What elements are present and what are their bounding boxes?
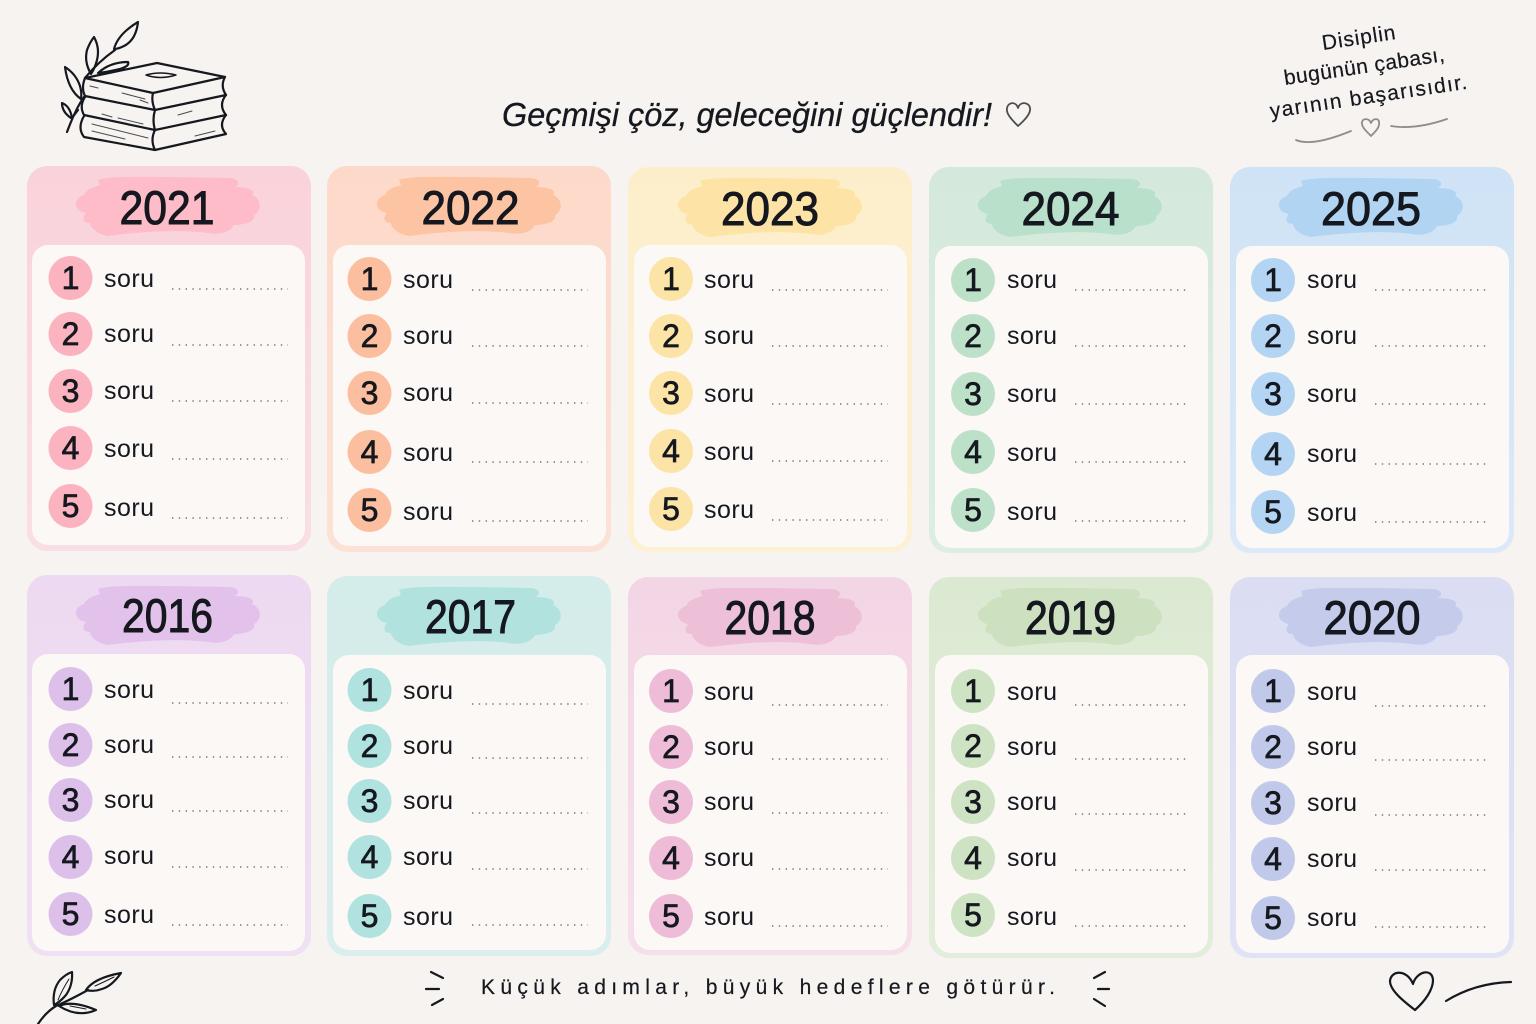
year blob <box>377 587 561 646</box>
question 5 <box>1251 896 1490 940</box>
question 3: 3 <box>1264 785 1282 821</box>
question 2: 2 <box>964 318 982 354</box>
question 1: soru <box>1007 266 1057 294</box>
card background <box>929 167 1213 553</box>
card: 2020 <box>1230 577 1514 958</box>
question 4: 4 <box>964 434 982 470</box>
question 3 <box>649 371 888 415</box>
card background <box>929 577 1213 958</box>
question 3: soru <box>403 787 453 815</box>
year: 2024 <box>1022 182 1120 235</box>
question 5: 5 <box>62 488 79 524</box>
question 3: soru <box>704 788 754 816</box>
question 1 <box>649 257 888 301</box>
year blob <box>678 178 862 237</box>
question 2 <box>951 724 1190 768</box>
question 5 <box>348 488 588 532</box>
question 5: soru <box>1007 903 1057 931</box>
question 5: 5 <box>361 898 378 934</box>
question 3 <box>1251 372 1490 416</box>
year blob <box>978 588 1162 647</box>
year blob <box>1279 178 1463 237</box>
question 2: 2 <box>62 316 79 352</box>
question 2 <box>348 724 588 768</box>
question 1: 1 <box>1264 673 1282 709</box>
question 3: soru <box>104 786 154 814</box>
question 3: 3 <box>62 373 79 409</box>
question 1: 1 <box>662 673 680 709</box>
question 5: soru <box>403 498 453 526</box>
question 1: soru <box>704 266 754 294</box>
question 4: 4 <box>662 433 680 469</box>
question 1: 1 <box>964 673 982 709</box>
year: 2017 <box>425 590 516 643</box>
question 3 <box>1251 781 1490 825</box>
question 2: 2 <box>662 729 680 765</box>
question 5 <box>1251 490 1490 534</box>
question 5: 5 <box>662 898 680 934</box>
question 4 <box>348 835 588 879</box>
question 4: 4 <box>1264 436 1282 472</box>
year blob <box>377 177 561 236</box>
card background <box>27 166 311 551</box>
question 5 <box>649 894 888 938</box>
question panel <box>634 245 907 547</box>
question 4 <box>48 835 288 879</box>
question 4: 4 <box>662 840 680 876</box>
card background <box>628 167 912 552</box>
question 4: soru <box>1307 845 1357 873</box>
footer left dashes <box>426 972 443 1005</box>
question 1: soru <box>104 676 154 704</box>
question 5 <box>348 894 588 938</box>
card: 2023 <box>628 167 912 552</box>
question 1: soru <box>1307 678 1357 706</box>
question 5: 5 <box>1264 900 1282 936</box>
footer right dashes <box>1094 972 1109 1006</box>
question 2 <box>649 314 888 358</box>
question 5: soru <box>704 496 754 524</box>
question 4: 4 <box>62 839 79 875</box>
question 2: 2 <box>662 318 680 354</box>
year: 2022 <box>422 181 520 234</box>
question 2: soru <box>104 731 154 759</box>
question 2 <box>348 314 588 358</box>
card: 2022 <box>327 166 611 552</box>
question 5: soru <box>1007 498 1057 526</box>
question 5: soru <box>104 494 154 522</box>
card background <box>1230 167 1514 553</box>
question 1 <box>1251 258 1490 302</box>
year: 2016 <box>122 589 213 642</box>
card: 2017 <box>327 576 611 956</box>
question 2 <box>951 314 1190 358</box>
question 3: 3 <box>361 375 378 411</box>
question 2: soru <box>1307 322 1357 350</box>
question 5: soru <box>403 903 453 931</box>
question 1 <box>48 667 288 711</box>
question 2 <box>1251 725 1490 769</box>
card: 2018 <box>628 577 912 955</box>
question 3: 3 <box>964 376 982 412</box>
card: 2019 <box>929 577 1213 958</box>
question 2: soru <box>403 322 453 350</box>
question panel <box>32 654 305 951</box>
question 4: 4 <box>361 839 378 875</box>
card background <box>327 166 611 552</box>
card background <box>628 577 912 955</box>
question 3: 3 <box>361 783 378 819</box>
question 3: soru <box>1307 789 1357 817</box>
question 2 <box>649 725 888 769</box>
question 2: soru <box>104 320 154 348</box>
question 1 <box>348 257 588 301</box>
question 3 <box>348 371 588 415</box>
year: 2025 <box>1321 182 1421 235</box>
question 5: soru <box>1307 904 1357 932</box>
card: 2025 <box>1230 167 1514 553</box>
icon: leaf sprig bottom-left <box>38 972 121 1024</box>
question 4 <box>1251 837 1490 881</box>
question 4: 4 <box>964 840 982 876</box>
question 3: 3 <box>662 375 680 411</box>
question 2: soru <box>403 732 453 760</box>
year blob <box>978 178 1162 237</box>
year: 2018 <box>724 591 816 644</box>
question 1: soru <box>1007 678 1057 706</box>
question panel <box>935 655 1208 953</box>
question 4 <box>48 426 288 470</box>
question 4: soru <box>403 843 453 871</box>
question 2 <box>48 312 288 356</box>
question 4: 4 <box>1264 841 1282 877</box>
question 1: 1 <box>361 672 378 708</box>
question 3: 3 <box>964 784 982 820</box>
icon: stack of books with leaves <box>62 22 226 150</box>
year: 2020 <box>1324 591 1420 644</box>
question 4: soru <box>704 438 754 466</box>
top-right quote: yarının başarısıdır. <box>1268 71 1469 123</box>
question 5: 5 <box>1264 494 1282 530</box>
question 1 <box>348 668 588 712</box>
question 1: 1 <box>62 260 79 296</box>
card: 2021 <box>27 166 311 551</box>
year blob <box>1279 588 1463 647</box>
question 3 <box>951 780 1190 824</box>
question 3: soru <box>1007 788 1057 816</box>
year: 2023 <box>721 182 819 235</box>
question 2: soru <box>1007 733 1057 761</box>
question 4 <box>1251 432 1490 476</box>
question 3: soru <box>1307 380 1357 408</box>
question 3: soru <box>403 379 453 407</box>
question 4 <box>348 430 588 474</box>
question 1: 1 <box>662 261 680 297</box>
question 3 <box>48 369 288 413</box>
question 1 <box>951 669 1190 713</box>
question panel <box>935 246 1208 548</box>
card: 2024 <box>929 167 1213 553</box>
question 2 <box>48 723 288 767</box>
question 1 <box>1251 669 1490 713</box>
question 2: 2 <box>361 728 378 764</box>
card background <box>327 576 611 956</box>
question 1: 1 <box>62 671 79 707</box>
question 1: soru <box>104 265 154 293</box>
question 1: 1 <box>361 261 378 297</box>
question 3: soru <box>1007 380 1057 408</box>
year: 2021 <box>120 181 214 234</box>
question 5: soru <box>704 903 754 931</box>
question 4: 4 <box>361 434 378 470</box>
question 4: soru <box>1007 439 1057 467</box>
question 5: soru <box>104 901 154 929</box>
question 1: 1 <box>1264 262 1282 298</box>
top-right quote: Disiplin <box>1320 21 1397 55</box>
question 3 <box>649 780 888 824</box>
top-right quote: bugünün çabası, <box>1282 43 1446 90</box>
question 5 <box>951 488 1190 532</box>
question panel <box>333 655 606 950</box>
question 4 <box>649 836 888 880</box>
question 1: soru <box>704 678 754 706</box>
question 2: soru <box>1307 733 1357 761</box>
question 2: 2 <box>964 728 982 764</box>
question 3: 3 <box>1264 376 1282 412</box>
question 4: soru <box>704 844 754 872</box>
question 1 <box>951 258 1190 302</box>
question 5: soru <box>1307 499 1357 527</box>
question 2: 2 <box>1264 729 1282 765</box>
question 4 <box>951 430 1190 474</box>
question 1: 1 <box>964 262 982 298</box>
card background <box>27 575 311 956</box>
question 4: soru <box>104 435 154 463</box>
question 4: soru <box>403 439 453 467</box>
card background <box>1230 577 1514 958</box>
question 5: 5 <box>361 492 378 528</box>
question panel <box>1236 655 1509 953</box>
question panel <box>333 245 606 546</box>
question 2: soru <box>1007 322 1057 350</box>
icon: title heart <box>1007 103 1030 126</box>
icon: heart with swoosh bottom-right <box>1390 972 1511 1010</box>
question 1 <box>48 256 288 300</box>
question 1: soru <box>403 677 453 705</box>
year blob <box>76 586 260 645</box>
question 4 <box>951 836 1190 880</box>
question 1: soru <box>1307 266 1357 294</box>
card: 2016 <box>27 575 311 956</box>
question 3: soru <box>704 380 754 408</box>
question 2 <box>1251 314 1490 358</box>
footer text: Küçük adımlar, büyük hedeflere götürür. <box>481 976 1055 999</box>
question 3 <box>951 372 1190 416</box>
question 3: soru <box>104 377 154 405</box>
question 1: soru <box>403 266 453 294</box>
title: Geçmişi çöz, geleceğini güçlendir! <box>502 96 992 133</box>
year: 2019 <box>1025 591 1116 644</box>
question panel <box>1236 246 1509 548</box>
quote flourish with heart <box>1296 119 1447 142</box>
question 4: soru <box>1007 844 1057 872</box>
question 5: 5 <box>964 492 982 528</box>
question 5: 5 <box>964 897 982 933</box>
question 5 <box>649 487 888 531</box>
question 2: soru <box>704 733 754 761</box>
question 4: soru <box>1307 440 1357 468</box>
question 3 <box>348 779 588 823</box>
year blob <box>678 588 862 647</box>
question 5 <box>48 484 288 528</box>
question 2: 2 <box>1264 318 1282 354</box>
question 5: 5 <box>662 491 680 527</box>
question 2: soru <box>704 322 754 350</box>
question 1 <box>649 669 888 713</box>
question 4: 4 <box>62 430 79 466</box>
question 5 <box>951 893 1190 937</box>
top-right quote <box>1268 21 1469 123</box>
question 2: 2 <box>62 727 79 763</box>
question 2: 2 <box>361 318 378 354</box>
question 3: 3 <box>62 782 79 818</box>
question 3 <box>48 778 288 822</box>
question 4 <box>649 429 888 473</box>
question 5 <box>48 892 288 936</box>
year blob <box>76 177 260 236</box>
question 5: 5 <box>62 896 79 932</box>
question 4: soru <box>104 842 154 870</box>
question 3: 3 <box>662 784 680 820</box>
question panel <box>634 655 907 950</box>
question panel <box>32 245 305 545</box>
